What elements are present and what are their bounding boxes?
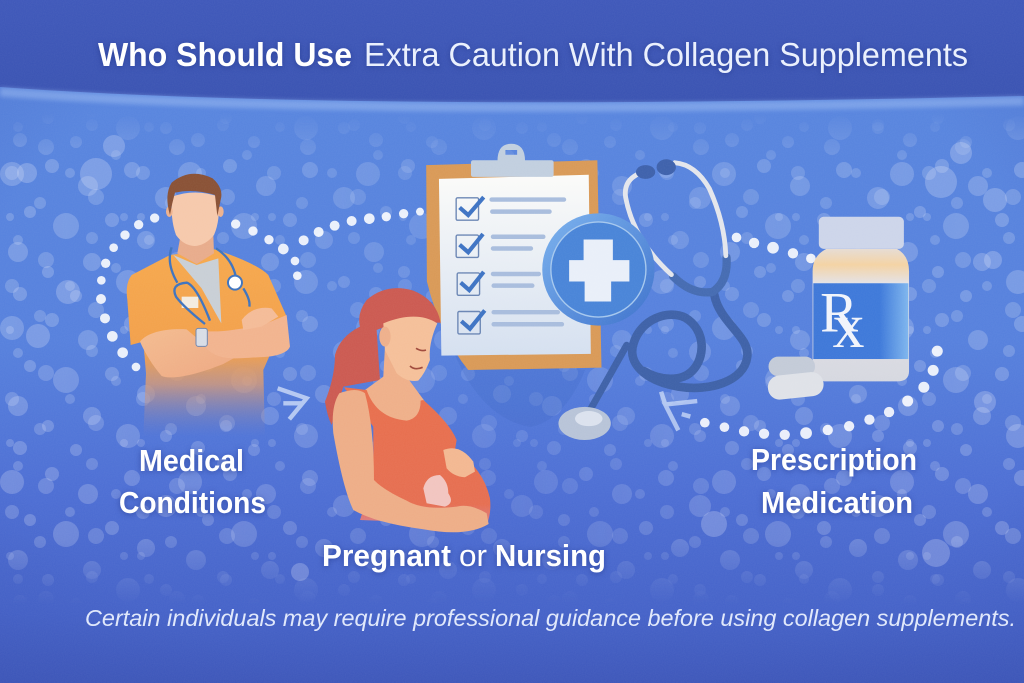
ears [166,206,173,217]
label: medical conditions: Medical [139,443,244,478]
head [172,192,219,246]
title [98,36,968,73]
id badge [182,297,198,308]
diaphragm [558,407,611,440]
hand [242,308,278,330]
pills [767,357,825,401]
cap [819,217,904,249]
label: medical conditions [119,443,266,520]
chest piece [228,276,242,290]
paper [439,175,591,356]
label: prescription medication: Prescription [751,442,917,477]
dotted path: right loop [700,233,943,440]
stethoscope [170,247,250,324]
tubing [632,295,747,388]
title: Extra Caution With Collagen Supplements [364,36,968,73]
arrow: to pregnant [278,388,307,419]
board [426,160,601,370]
hand on belly [443,448,475,477]
label: prescription medication [751,442,917,520]
arm left [140,329,237,377]
label: medical conditions: Conditions [119,485,266,520]
arm right [198,315,290,358]
bokeh dot pattern [0,120,1024,595]
dotted path: left loop [96,208,424,371]
y joint [673,257,727,292]
label: prescription medication: Medication [761,485,913,520]
label: pregnant or nursing: Nursing [495,538,606,573]
label: pregnant or nursing [322,538,606,573]
label [813,283,908,359]
chest tube [589,345,627,412]
body [813,249,909,381]
icon: medical professional with crossed arms [127,174,290,437]
arm [333,390,489,532]
footer note: Certain individuals may require professional guidance before using collagen supplements. [85,605,1016,631]
x text: x [833,290,865,361]
ear tubes [625,163,726,275]
arrow: left-pointing [661,392,697,430]
scrubs [127,249,287,437]
check marks [460,197,485,329]
shadow under clipboard [455,355,585,427]
dress [344,387,490,525]
icon: stethoscope [558,159,747,440]
list lines [492,200,564,324]
label: pregnant or nursing: or [459,538,487,573]
rx text: R [820,281,858,344]
ear right [218,206,224,217]
hair [325,288,441,425]
face [383,317,437,381]
header band [0,0,1024,107]
icon: pregnant woman [325,288,490,532]
neck [365,347,425,423]
title: Who Should Use [98,36,352,73]
checkboxes [456,198,480,334]
icon: prescription bottle with pills [767,217,909,401]
clip [471,144,554,177]
watch [196,328,207,346]
ear [379,327,391,347]
icon: medical cross badge [542,213,655,326]
baby silhouette [423,475,451,507]
eye and smile [410,348,426,369]
shirt [173,255,221,323]
icon: clipboard with checklist [426,144,601,370]
hair [167,174,221,216]
label: pregnant or nursing: Pregnant [322,538,451,573]
ear tips [636,159,676,179]
neck [177,235,214,264]
